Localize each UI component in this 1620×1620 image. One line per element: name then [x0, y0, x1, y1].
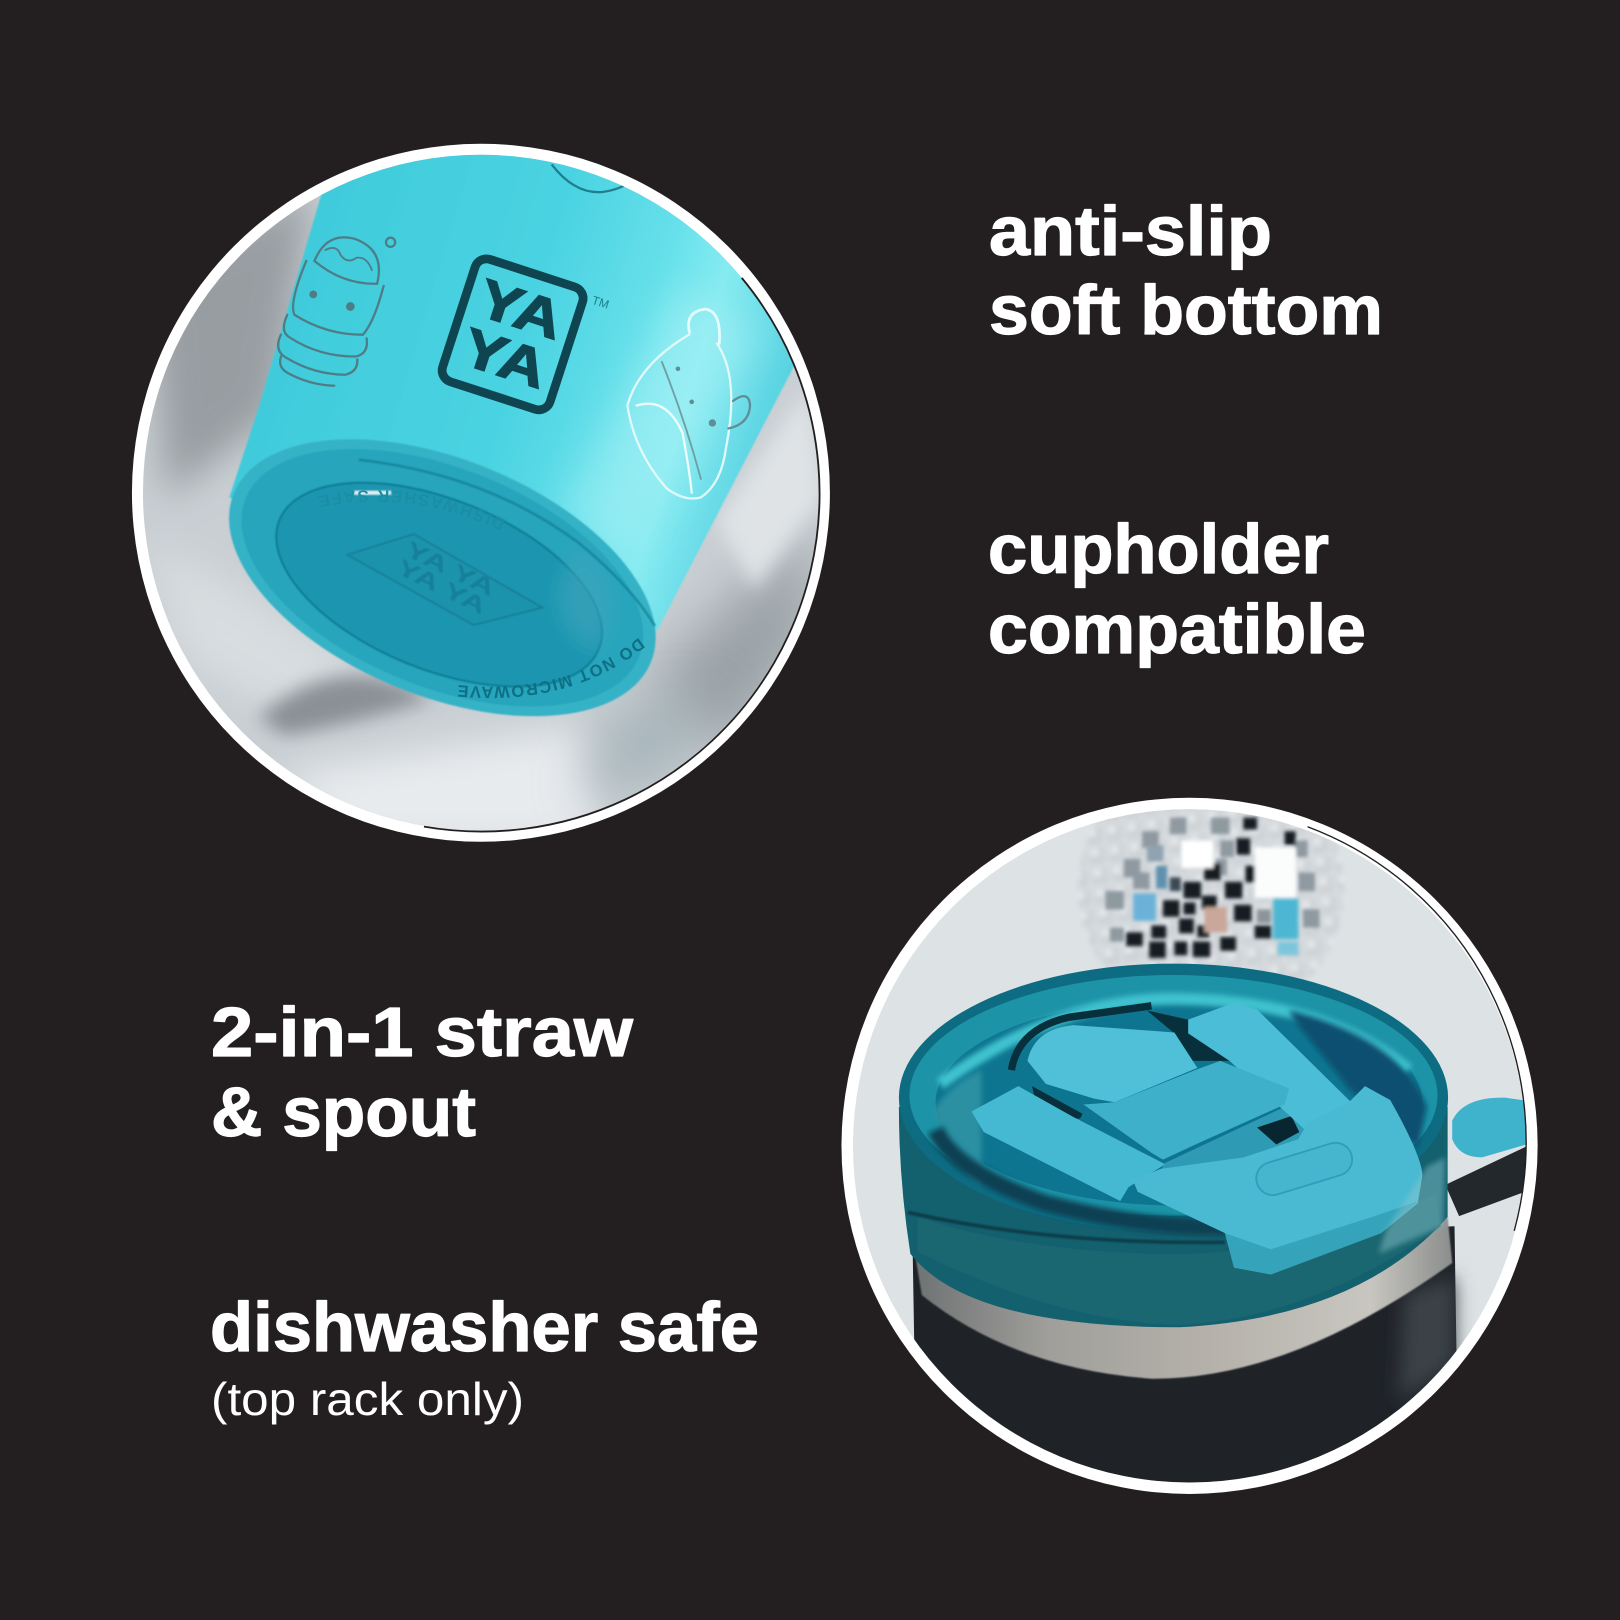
trademark mark: TM: [590, 293, 611, 312]
photo circle: anti-slip soft bottom of teal tumbler: [132, 144, 830, 842]
YAYA logo on tumbler: [439, 256, 586, 413]
photo circle: lid with 2-in-1 straw and spout: [841, 798, 1538, 1494]
infographic canvas: [132, 144, 1538, 1494]
text: 2-in-1 straw and spout: [211, 993, 634, 1151]
text: dishwasher safe: dishwasher safe: [210, 1288, 759, 1366]
base molded text: DO NOT MICROWAVE: [458, 638, 645, 698]
straw cover: [1027, 1025, 1197, 1102]
embossed base logo: YA YA: [393, 555, 490, 620]
doodle: bread character: [627, 309, 750, 499]
embossed base logo: [347, 534, 542, 625]
base molded text: [318, 490, 645, 698]
slider well and gaps: [1011, 1006, 1308, 1170]
YAYA logo on tumbler: YA: [471, 268, 570, 352]
handle: [1448, 1098, 1526, 1216]
disco ball: [1078, 809, 1344, 980]
mug body shading: [1399, 1277, 1455, 1401]
tumbler base: [228, 439, 657, 718]
embossed base logo: YA YA: [401, 537, 499, 601]
doodle: top partial character: [552, 164, 632, 192]
photo edge hairline: [424, 278, 820, 832]
text: anti-slip soft bottom: [989, 192, 1383, 349]
text: dishwasher safe: [210, 1288, 759, 1425]
text: cupholder compatible: cupholder: [988, 510, 1329, 588]
white ring: [132, 144, 830, 842]
text: anti-slip soft bottom: anti-slip: [989, 192, 1272, 270]
studio background: [853, 809, 1526, 1482]
photo edge hairline: [1308, 827, 1526, 1231]
white ring: [841, 798, 1538, 1494]
spout strap: [1188, 1003, 1351, 1132]
mug body: [912, 1226, 1456, 1482]
text: 2-in-1 straw and spout: & spout: [211, 1073, 476, 1151]
text: cupholder compatible: [988, 510, 1366, 668]
body highlight: [561, 286, 763, 571]
left slider piece: [971, 1086, 1165, 1201]
text: 2-in-1 straw and spout: 2-in-1 straw: [211, 993, 634, 1071]
YAYA logo on tumbler: YA: [455, 317, 555, 400]
front slider tab: [1133, 1086, 1422, 1274]
lid glass right reflection: [1379, 1157, 1445, 1254]
base molded text: DISHWASHER SAFE: [318, 490, 504, 530]
middle slider piece: [1083, 1061, 1289, 1160]
glass lid rim: [899, 964, 1448, 1242]
tumbler body: [229, 130, 809, 631]
doodle: stacked dessert character: [277, 236, 396, 387]
fabric background: [143, 154, 819, 830]
glass lid skirt: [899, 1107, 1448, 1327]
text: anti-slip soft bottom: soft bottom: [989, 271, 1383, 349]
text: dishwasher safe: (top rack only): [211, 1373, 524, 1425]
text: cupholder compatible: compatible: [988, 590, 1366, 668]
steel band: [915, 1217, 1452, 1379]
